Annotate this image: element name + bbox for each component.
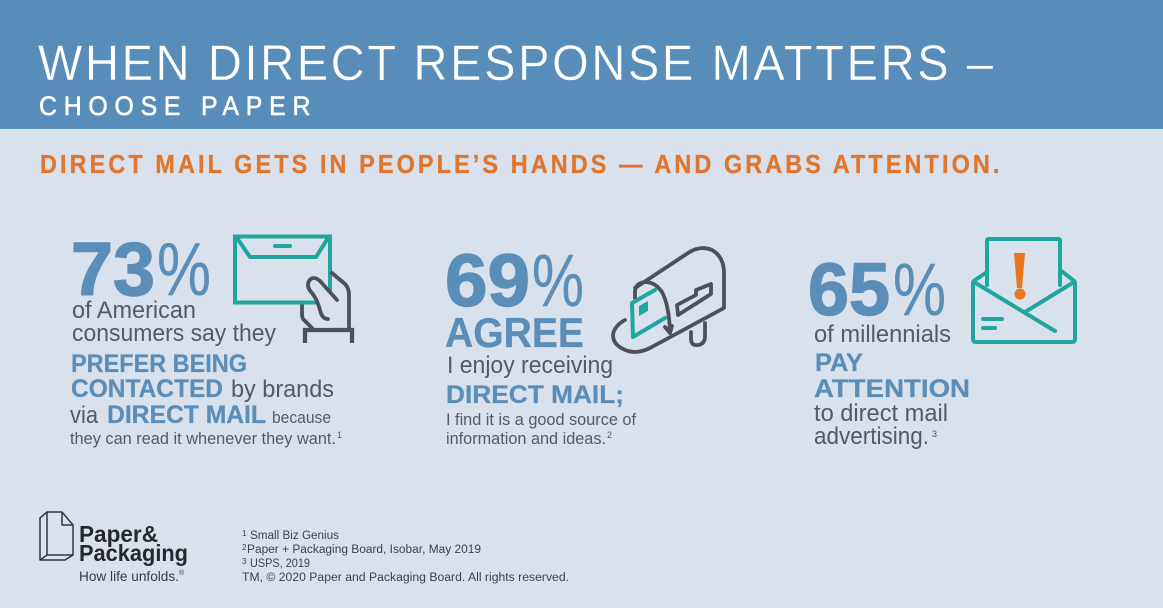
panel: 73 percent statistic xyxy=(70,227,352,448)
stat number 65%: 65 xyxy=(808,248,890,331)
body text: DIRECT MAIL; xyxy=(446,381,624,409)
body text: CONTACTED xyxy=(71,375,223,403)
footnotes: Paper + Packaging Board, Isobar, May 2019 xyxy=(247,544,481,556)
body text: information and ideas. xyxy=(446,429,606,448)
title: WHEN DIRECT RESPONSE MATTERS – xyxy=(38,36,993,91)
body text: 3 xyxy=(932,429,937,439)
body text: 1 xyxy=(337,430,342,440)
body text: consumers say they xyxy=(72,320,276,347)
stat number 69% AGREE: AGREE xyxy=(445,309,584,356)
body text: because xyxy=(272,408,331,427)
section heading: DIRECT MAIL GETS IN PEOPLE’S HANDS — AND GRABS ATTENTION. xyxy=(40,151,999,179)
body text: of millennials xyxy=(814,321,951,348)
body text: I enjoy receiving xyxy=(447,352,613,379)
stat number 69% AGREE xyxy=(445,239,584,356)
subtitle: CHOOSE PAPER xyxy=(39,92,310,121)
stat number 73%: 73 xyxy=(71,227,155,311)
footnotes: USPS, 2019 xyxy=(250,558,310,570)
panel: 65 percent statistic xyxy=(808,239,1075,450)
logo: Paper & Packaging: ® xyxy=(179,569,185,577)
body text: via xyxy=(70,402,99,429)
body text: I find it is a good source of xyxy=(446,410,636,429)
footnotes xyxy=(242,529,569,584)
body text: they can read it whenever they want. xyxy=(70,429,336,448)
icon: folded paper sheet xyxy=(40,512,73,560)
panel: 69 percent statistic xyxy=(445,239,724,448)
stat number 69% AGREE: 69 xyxy=(445,239,530,322)
footnotes: Small Biz Genius xyxy=(250,530,339,542)
body text: advertising. xyxy=(814,423,929,450)
body text xyxy=(70,297,342,448)
body text: PREFER BEING xyxy=(71,350,247,378)
footnotes: 3 xyxy=(242,557,247,566)
logo: Paper & Packaging: Packaging xyxy=(79,540,188,566)
body text: of American xyxy=(72,297,196,324)
logo: Paper & Packaging: Paper& xyxy=(79,521,158,547)
body text: DIRECT MAIL xyxy=(107,401,266,429)
body text: PAY xyxy=(815,349,863,377)
body text: to direct mail xyxy=(814,400,948,427)
stat number 69% AGREE: % xyxy=(532,239,584,322)
body text xyxy=(814,321,970,450)
icon: open envelope with exclamation mark xyxy=(973,239,1075,342)
footnotes: 2 xyxy=(242,543,247,552)
body text: ATTENTION xyxy=(814,375,970,403)
icon: envelope held in hand xyxy=(235,236,352,343)
logo: Paper & Packaging xyxy=(40,512,188,584)
body text: 2 xyxy=(607,430,612,440)
stat number 73%: % xyxy=(157,227,211,311)
icon: mailbox with letter xyxy=(613,248,724,352)
header banner xyxy=(0,0,1163,129)
body text: by brands xyxy=(231,376,334,403)
stat number 65%: % xyxy=(893,248,946,331)
logo: Paper & Packaging: How life unfolds. xyxy=(79,569,179,584)
body text xyxy=(446,352,636,448)
footnotes: TM, © 2020 Paper and Packaging Board. All rights reserved. xyxy=(242,572,569,584)
stat number 65% xyxy=(808,248,946,331)
stat number 73% xyxy=(71,227,211,311)
footnotes: 1 xyxy=(242,529,247,538)
